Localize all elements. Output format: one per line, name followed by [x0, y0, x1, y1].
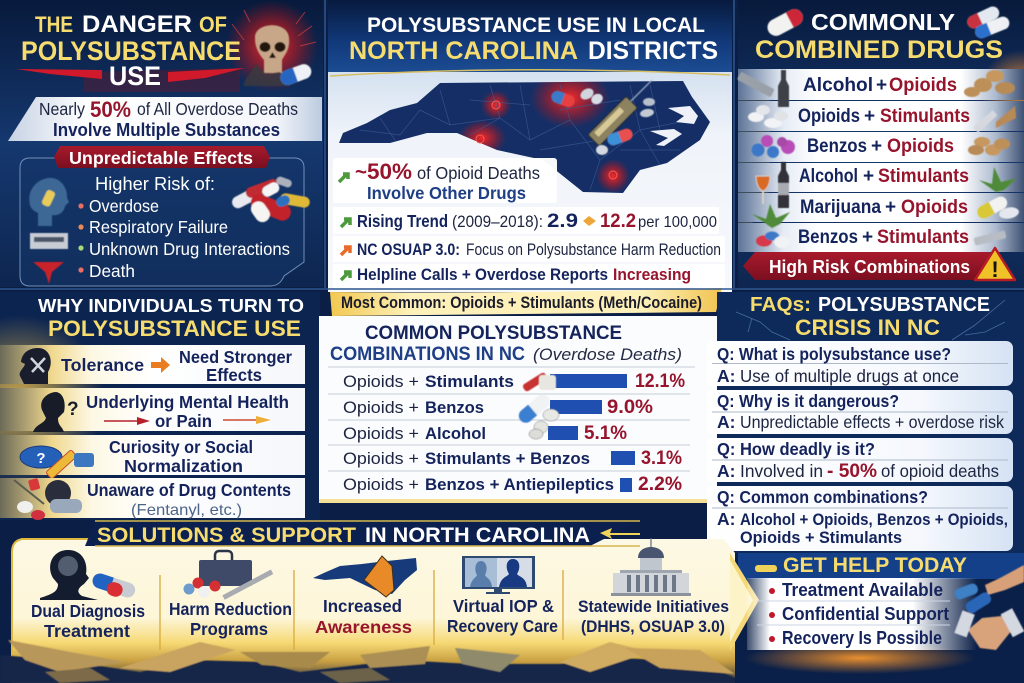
bar chart: combinations: Stimulants + Benzos	[425, 449, 590, 468]
heading: chart title	[330, 323, 682, 365]
decoration: broken rock foreground	[0, 640, 740, 683]
panel: get help today	[730, 553, 1024, 683]
heading: local districts	[330, 14, 730, 76]
card: what is polysubstance use: Use of multiple drugs at once	[740, 366, 959, 386]
bar chart: combinations: Opioids +	[343, 475, 419, 494]
card: common combinations: Q: Common combinations?	[717, 487, 928, 507]
heading: why individuals: WHY INDIVIDUALS TURN TO	[38, 295, 304, 316]
item: dual diagnosis treatment: Treatment	[44, 621, 130, 641]
heading: chart title: COMBINATIONS IN NC	[330, 344, 525, 365]
list: drug combination rows: Stimulants	[878, 166, 969, 187]
panel: faqs	[707, 292, 1024, 554]
item: harm reduction programs: Programs	[190, 619, 268, 639]
list: drug combination rows: +	[876, 75, 887, 96]
row: unaware of contents: Unaware of Drug Contents	[87, 480, 291, 500]
panel: why individuals turn to polysubstance use	[0, 292, 320, 520]
icon: head silhouette and medical symbols	[29, 178, 69, 284]
heading: the danger of polysubstance use: THE	[35, 12, 73, 37]
card: what is polysubstance use	[707, 341, 1013, 386]
text: help list: Confidential Support	[782, 603, 949, 624]
list: drug combination rows: Opioids	[887, 136, 954, 157]
card: how deadly: - 50%	[827, 461, 877, 482]
row: curiosity: ?	[36, 450, 46, 467]
heading: the danger of polysubstance use: USE	[109, 61, 161, 91]
row: nc osuap 3.0	[333, 236, 725, 262]
callout: 50% of opioid deaths: Involve Other Drugs	[367, 183, 526, 203]
card: common combinations	[707, 486, 1013, 551]
icon: helping hands and handshake	[953, 565, 1024, 650]
bar chart: combinations: Opioids +	[343, 398, 419, 417]
list: drug combination rows: Alcohol	[803, 75, 873, 96]
heading: why individuals	[38, 295, 304, 341]
row: rising trend: per 100,000	[638, 214, 717, 231]
heading: local districts: NORTH CAROLINA	[349, 37, 578, 65]
item: harm reduction programs	[169, 551, 292, 639]
list: drug combination rows: Opioids	[798, 106, 860, 127]
map: north carolina hot spots	[339, 68, 710, 193]
card: why dangerous: Unpredictable effects + overdose risk	[740, 412, 1004, 432]
bar chart: combinations: 3.1%	[641, 448, 682, 469]
bar chart: combinations: Benzos + Antiepileptics	[425, 475, 614, 494]
heading: solutions band: SOLUTIONS & SUPPORT	[97, 524, 356, 547]
bar chart: combinations: Stimulants	[425, 372, 514, 391]
panel: commonly combined drugs	[737, 0, 1024, 290]
row: nc osuap 3.0: NC OSUAP 3.0:	[357, 240, 460, 259]
text: higher risk list: Higher Risk of:	[95, 174, 215, 194]
callout: 50% of opioid deaths: of Opioid Deaths	[417, 163, 540, 183]
heading: commonly combined drugs: COMMONLY	[811, 9, 955, 35]
heading: why individuals: POLYSUBSTANCE USE	[48, 316, 301, 341]
heading: the danger of polysubstance use: DANGER	[82, 11, 192, 38]
list: drug combination rows: +	[885, 197, 896, 218]
text: higher risk list: Death	[89, 261, 135, 281]
card: common combinations: Opioids + Stimulants	[740, 528, 902, 547]
text: higher risk list	[78, 174, 290, 281]
card: how deadly: A:	[717, 461, 735, 481]
row: mental health: ?	[67, 399, 79, 420]
row: mental health: or Pain	[155, 411, 212, 431]
item: increased awareness: Increased	[323, 596, 402, 616]
card: why dangerous	[707, 390, 1013, 434]
text: higher risk list: Overdose	[89, 196, 159, 216]
bar chart: combinations	[328, 367, 695, 495]
row: rising trend: Rising Trend	[357, 211, 448, 231]
card: what is polysubstance use: A:	[717, 366, 735, 386]
row: rising trend: 12.2	[600, 211, 636, 232]
list: drug combination rows: +	[862, 227, 873, 248]
row: curiosity: Curiosity or Social	[109, 437, 253, 457]
bar chart: combinations: Opioids +	[343, 372, 419, 391]
banner: most common opioids + stimulants	[330, 288, 722, 316]
panel: polysubstance use in local north carolina districts	[328, 0, 732, 292]
banner: high risk combinations: High Risk Combinations	[769, 257, 970, 277]
row: tolerance	[0, 345, 305, 385]
card: common combinations: A:	[717, 509, 735, 529]
callout: nearly 50% of overdose deaths: 50%	[90, 97, 131, 122]
card: how deadly: Involved in	[740, 461, 823, 481]
panel: higher risk box	[20, 158, 311, 286]
list: drug combination rows: +	[871, 136, 882, 157]
callout: 50% of opioid deaths: 50%	[367, 159, 412, 184]
row: curiosity: Normalization	[124, 456, 243, 476]
heading: local districts: POLYSUBSTANCE USE IN LOCAL	[367, 14, 705, 37]
row: rising trend: (2009–2018):	[452, 212, 543, 231]
text: help list: Recovery Is Possible	[782, 627, 942, 648]
card: how deadly: of opioid deaths	[881, 461, 999, 481]
icon: warning triangle	[975, 248, 1015, 282]
item: harm reduction programs: Harm Reduction	[169, 599, 292, 619]
row: unaware of contents: (Fentanyl, etc.)	[131, 502, 242, 519]
card: why dangerous: Q: Why is it dangerous?	[717, 391, 899, 411]
item: virtual iop and recovery care: Virtual IOP &	[453, 596, 554, 616]
bar chart: combinations: 5.1%	[584, 423, 627, 444]
list: drug combination rows: Marijuana	[800, 197, 881, 218]
heading: chart title: COMMON POLYSUBSTANCE	[365, 323, 622, 344]
bar chart: combinations: Opioids +	[343, 449, 419, 468]
item: dual diagnosis treatment	[31, 550, 145, 641]
row: curiosity	[0, 435, 305, 479]
heading: faqs: FAQs:	[750, 294, 811, 316]
item: virtual iop and recovery care	[447, 556, 558, 636]
list: drug combination rows: Opioids	[901, 197, 968, 218]
list: drug combination rows: Alcohol	[799, 166, 858, 187]
row: tolerance: Effects	[206, 365, 262, 385]
item: statewide initiatives: (DHHS, OSUAP 3.0)	[581, 617, 725, 636]
row: helpline calls: Increasing	[613, 265, 691, 284]
item: statewide initiatives: Statewide Initiatives	[578, 597, 729, 616]
card: how deadly	[707, 438, 1013, 482]
text: help list: Treatment Available	[782, 579, 943, 600]
card: why dangerous: A:	[717, 412, 735, 432]
row: tolerance: Need Stronger	[179, 347, 292, 367]
list: drug combination rows: +	[864, 106, 875, 127]
heading: solutions band	[85, 521, 640, 547]
row: mental health	[0, 388, 305, 432]
panel: the danger of polysubstance use	[0, 0, 323, 287]
heading: get help today: GET HELP TODAY	[783, 554, 967, 577]
callout: 50% of opioid deaths	[333, 158, 557, 203]
row: mental health: Underlying Mental Health	[86, 392, 289, 412]
card: how deadly: Q: How deadly is it?	[717, 439, 875, 459]
row: helpline calls	[333, 264, 725, 288]
bar chart: combinations: 12.1%	[635, 371, 685, 392]
banner: unpredictable effects: Unpredictable Effects	[69, 148, 253, 168]
row: unaware of contents	[0, 478, 305, 520]
list: drug combination rows: Stimulants	[877, 227, 969, 248]
icon: pills and syringe on map	[550, 75, 659, 155]
decoration: panel dividers	[0, 0, 1024, 289]
banner: most common opioids + stimulants: Most Common: Opioids + Stimulants (Meth/Cocaine)	[341, 294, 702, 312]
bar chart: combinations: Alcohol	[425, 424, 486, 443]
icons: pills on chart	[516, 372, 559, 439]
list: drug combination rows: +	[863, 166, 874, 187]
panel: common polysubstance combinations chart	[319, 316, 717, 503]
row: rising trend	[333, 207, 719, 234]
bar chart: combinations: Opioids +	[343, 424, 419, 443]
row: tolerance: Tolerance	[61, 355, 144, 375]
bar chart: combinations: 9.0%	[607, 397, 653, 418]
icon: warning triangle: !	[991, 257, 999, 282]
callout: nearly 50% of overdose deaths: of All Overdose Deaths	[137, 99, 298, 119]
heading: the danger of polysubstance use: OF	[199, 12, 227, 37]
banner: high risk combinations	[743, 248, 1015, 282]
list: drug combination rows	[738, 69, 1024, 252]
icon: skull and capsule	[244, 25, 313, 87]
icons: header capsules	[764, 4, 1011, 40]
card: what is polysubstance use: Q: What is polysubstance use?	[717, 344, 951, 364]
heading: faqs	[750, 294, 990, 340]
text: higher risk list: Unknown Drug Interactions	[89, 239, 290, 259]
icon: pill cluster	[230, 176, 311, 225]
bar chart: combinations: Benzos	[425, 398, 484, 417]
text: help list	[745, 554, 977, 674]
row: nc osuap 3.0: Focus on Polysubstance Harm Reduction	[466, 241, 721, 259]
text: higher risk list: Respiratory Failure	[89, 217, 228, 237]
heading: the danger of polysubstance use	[16, 11, 245, 91]
heading: local districts: DISTRICTS	[588, 37, 718, 65]
item: virtual iop and recovery care: Recovery Care	[447, 616, 558, 636]
heading: faqs: POLYSUBSTANCE	[818, 294, 990, 316]
callout: nearly 50% of overdose deaths: Involve Multiple Substances	[53, 120, 280, 140]
item: increased awareness	[313, 556, 417, 637]
item: statewide initiatives	[578, 538, 729, 636]
callout: nearly 50% of overdose deaths: Nearly	[39, 99, 85, 119]
bar chart: combinations: 2.2%	[638, 474, 682, 495]
heading: commonly combined drugs	[755, 9, 1003, 64]
heading: chart title: (Overdose Deaths)	[533, 345, 682, 364]
icons: drug illustrations	[737, 70, 1020, 248]
callout: nearly 50% of overdose deaths	[8, 97, 322, 141]
list: drug combination rows: Benzos	[807, 136, 867, 157]
heading: the danger of polysubstance use: POLYSUBSTANCE	[21, 36, 241, 66]
list: drug combination rows: Benzos	[798, 227, 858, 248]
row: helpline calls: Helpline Calls + Overdose Reports	[357, 265, 608, 284]
heading: commonly combined drugs: COMBINED DRUGS	[755, 36, 1003, 64]
list: drug combination rows: Stimulants	[880, 106, 970, 127]
row: rising trend: 2.9	[547, 211, 578, 232]
callout: 50% of opioid deaths: ~	[355, 161, 367, 184]
item: increased awareness: Awareness	[315, 617, 412, 637]
heading: solutions band: IN NORTH CAROLINA	[365, 524, 590, 547]
panel: solutions and support	[0, 521, 740, 683]
list: drug combination rows: Opioids	[889, 75, 957, 96]
heading: faqs: CRISIS IN NC	[795, 315, 940, 340]
item: dual diagnosis treatment: Dual Diagnosis	[31, 601, 145, 621]
